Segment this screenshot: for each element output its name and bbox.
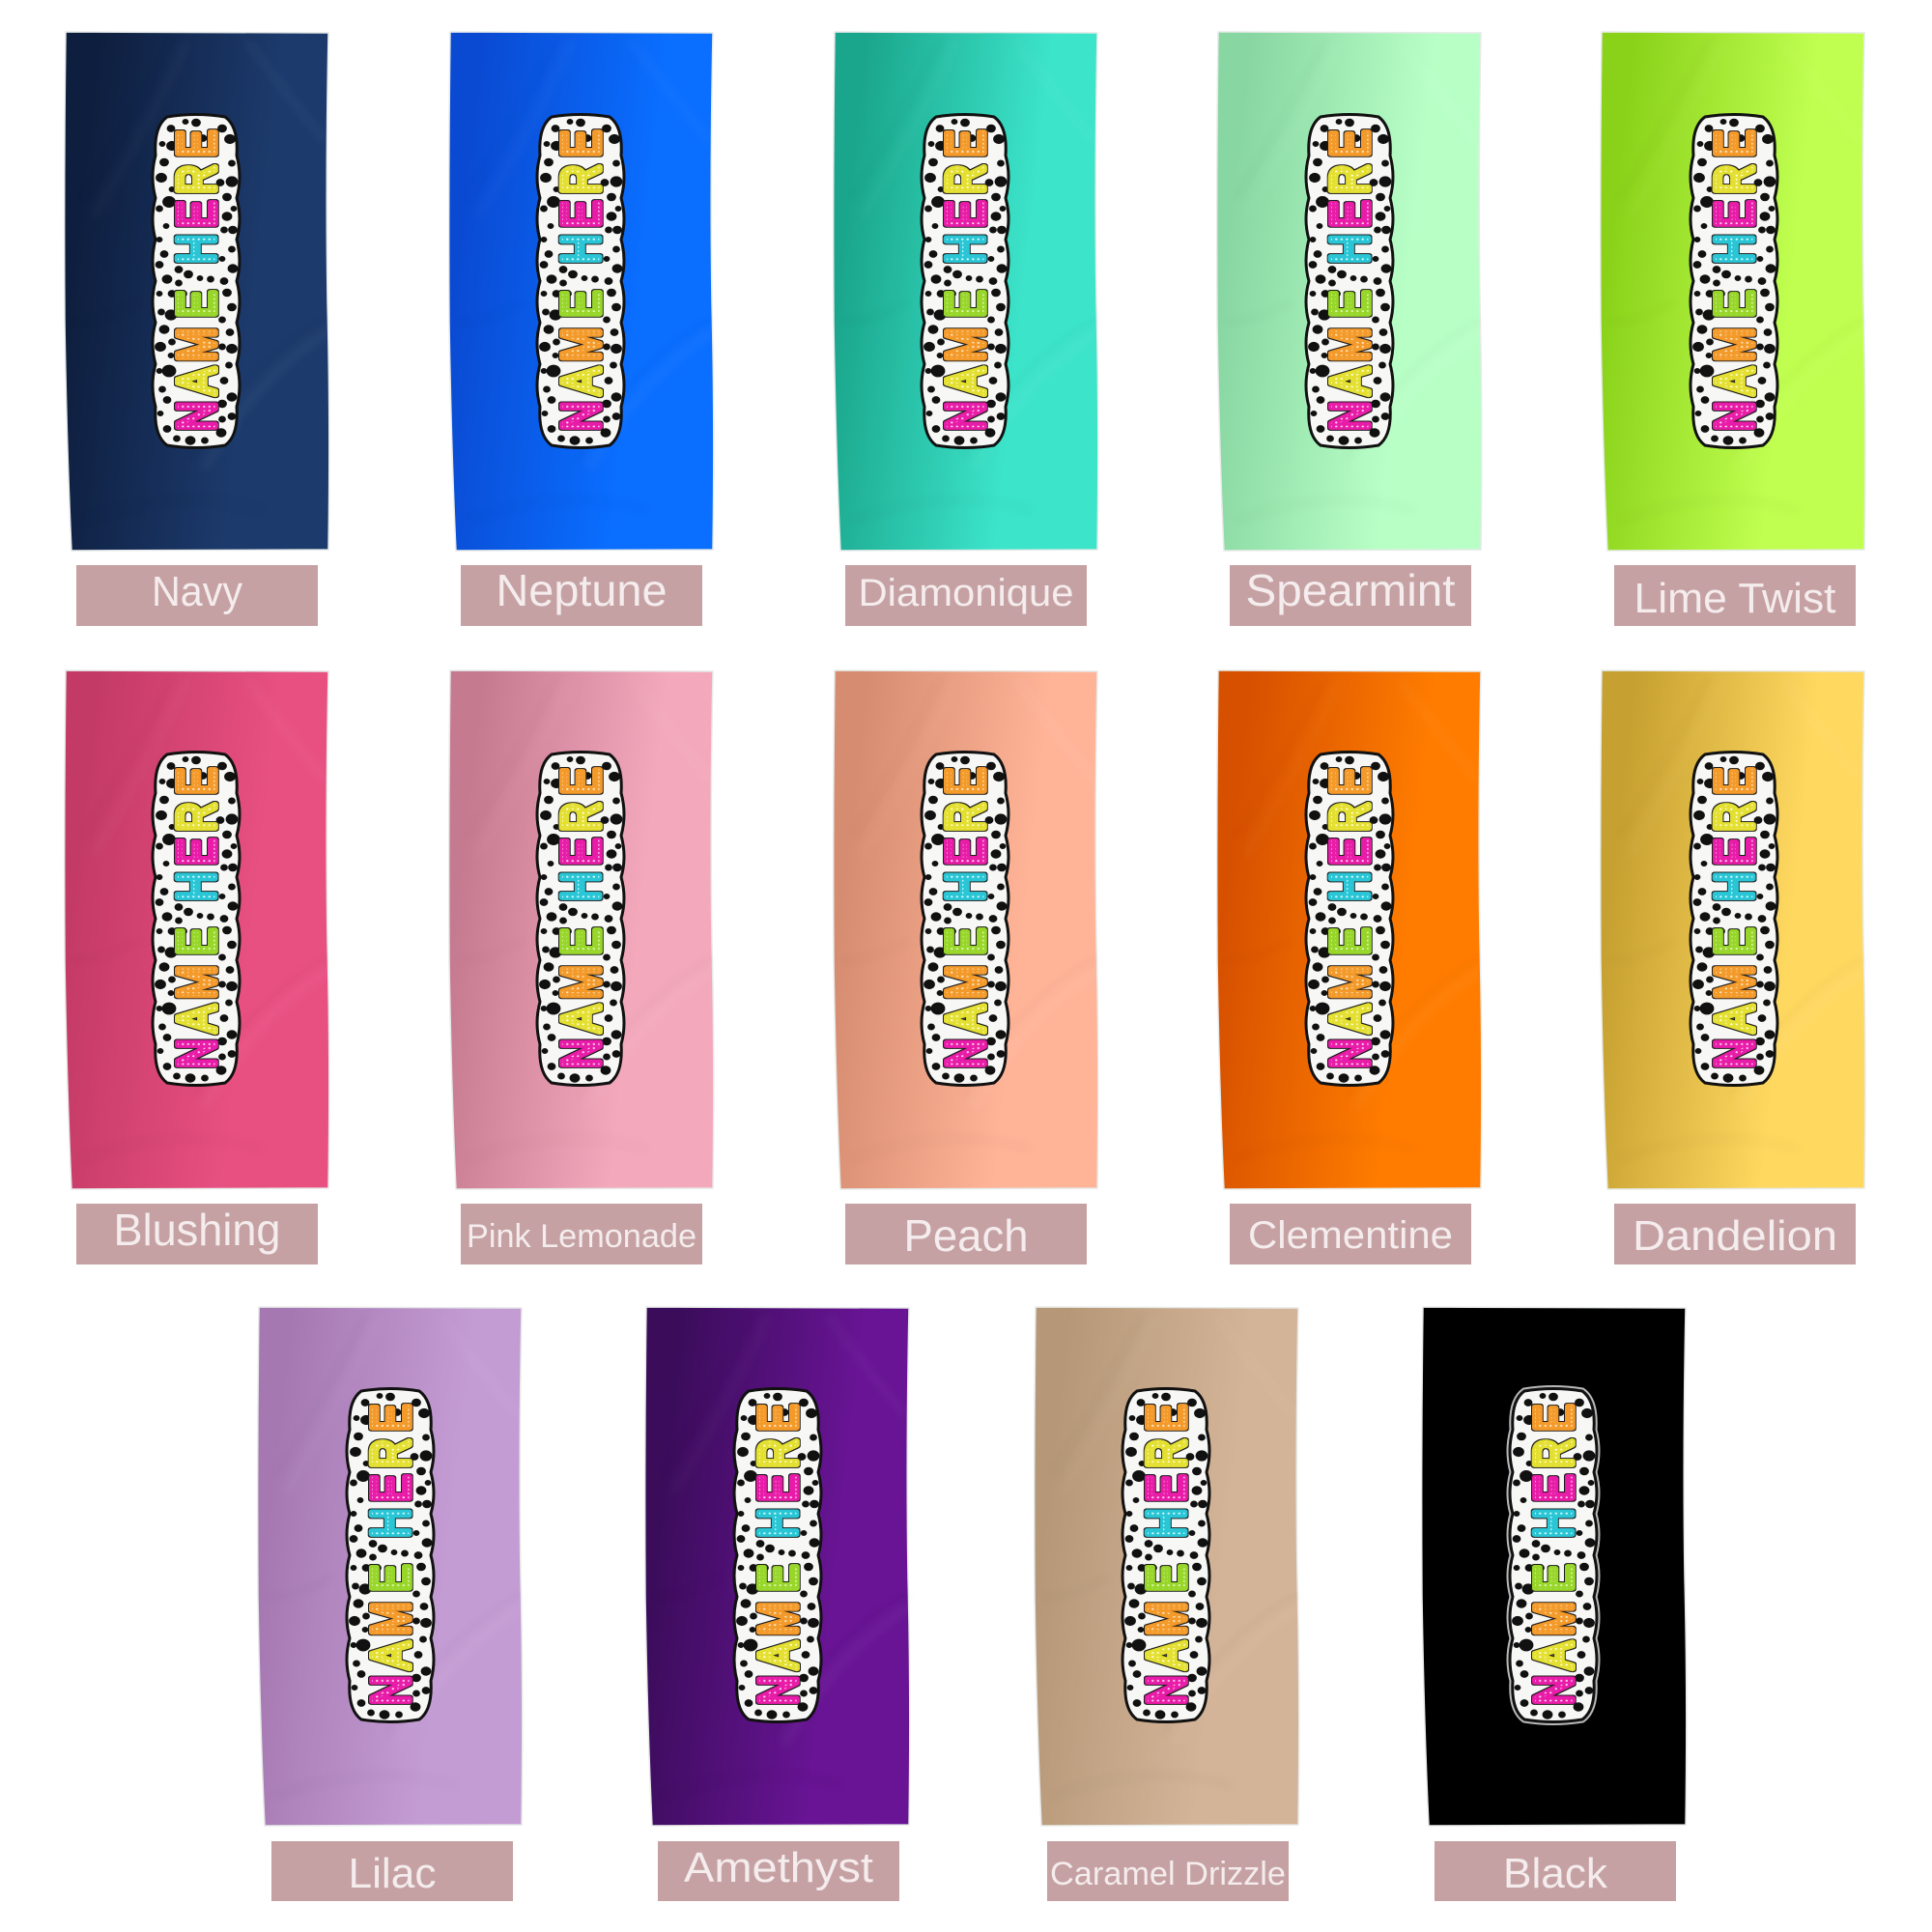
label: Black: Black — [1503, 1850, 1608, 1897]
name patch: NAME HERE — [1137, 1405, 1197, 1705]
label: Pink Lemonade: Pink Lemonade — [467, 1218, 696, 1255]
label: Diamonique: Diamonique — [858, 572, 1074, 614]
name patch — [1690, 114, 1777, 448]
panel: Pink Lemonade towel — [449, 670, 714, 1264]
towel: Clementine — [1217, 670, 1482, 1189]
name patch: NAME HERE — [1705, 130, 1765, 431]
panel: Blushing towel — [65, 670, 329, 1264]
panel: Navy towel — [65, 32, 329, 626]
label: Blushing: Blushing — [114, 1205, 280, 1255]
towel: Dandelion — [1601, 670, 1865, 1189]
name patch: NAME HERE — [936, 768, 996, 1068]
label: Caramel Drizzle: Caramel Drizzle — [1050, 1856, 1286, 1892]
name patch: NAME HERE — [1321, 768, 1380, 1068]
name patch — [153, 114, 240, 448]
panel: Amethyst towel — [645, 1307, 910, 1901]
name patch: NAME HERE — [1524, 1405, 1584, 1705]
name patch — [347, 1389, 434, 1721]
label: Neptune: Neptune — [497, 565, 667, 615]
label: Amethyst — [658, 1841, 899, 1901]
label: Dandelion — [1614, 1204, 1856, 1264]
label: Lime Twist — [1614, 565, 1856, 626]
name patch — [537, 114, 624, 448]
towel: Amethyst — [645, 1307, 910, 1826]
towel: Peach — [834, 670, 1098, 1189]
label: Spearmint: Spearmint — [1246, 565, 1456, 615]
towel: Black — [1422, 1307, 1687, 1826]
towel: Diamonique — [834, 32, 1098, 551]
name patch: NAME HERE — [1705, 768, 1765, 1068]
label: Navy — [76, 565, 318, 626]
panel: Lilac towel — [258, 1307, 523, 1901]
towel: Blushing — [65, 670, 329, 1189]
name patch: NAME HERE — [749, 1405, 809, 1705]
label: Peach: Peach — [904, 1210, 1028, 1261]
name patch: NAME HERE — [361, 1405, 421, 1705]
towel: Lilac — [258, 1307, 523, 1826]
panel: Peach towel — [834, 670, 1098, 1264]
name patch — [922, 752, 1009, 1086]
label: Amethyst: Amethyst — [684, 1844, 873, 1891]
label: Dandelion: Dandelion — [1633, 1212, 1837, 1260]
panel: Caramel Drizzle towel — [1035, 1307, 1299, 1901]
name patch — [153, 752, 240, 1086]
name patch — [734, 1389, 821, 1721]
name patch: NAME HERE — [167, 130, 227, 431]
label: Diamonique — [845, 565, 1087, 626]
towel: Spearmint — [1217, 32, 1482, 551]
label: Spearmint — [1230, 565, 1471, 626]
label: Peach — [845, 1204, 1087, 1264]
name patch: NAME HERE — [552, 768, 611, 1068]
name patch — [1122, 1389, 1209, 1721]
name patch: NAME HERE — [552, 130, 611, 431]
panel: Black towel — [1422, 1307, 1687, 1901]
towel: Caramel Drizzle — [1035, 1307, 1299, 1826]
panel: Clementine towel — [1217, 670, 1482, 1264]
panel: Diamonique towel — [834, 32, 1098, 626]
panel: Spearmint towel — [1217, 32, 1482, 626]
label: Lilac — [271, 1841, 513, 1901]
name patch — [537, 752, 624, 1086]
towel: Pink Lemonade — [449, 670, 714, 1189]
name patch — [1306, 752, 1393, 1086]
label: Navy: Navy — [152, 568, 242, 615]
label: Caramel Drizzle — [1047, 1841, 1289, 1901]
name patch: NAME HERE — [1321, 130, 1380, 431]
towel: Lime Twist — [1601, 32, 1865, 551]
panel: Neptune towel — [449, 32, 714, 626]
name patch — [1690, 752, 1777, 1086]
label: Neptune — [461, 565, 702, 626]
label: Pink Lemonade — [461, 1204, 702, 1264]
towel: Neptune — [449, 32, 714, 551]
label: Black — [1435, 1841, 1676, 1901]
name patch: NAME HERE — [936, 130, 996, 431]
label: Clementine: Clementine — [1248, 1214, 1453, 1257]
towel: Navy — [65, 32, 329, 551]
label: Lime Twist: Lime Twist — [1634, 575, 1835, 622]
name patch — [1306, 114, 1393, 448]
name patch: NAME HERE — [167, 768, 227, 1068]
panel: Dandelion towel — [1601, 670, 1865, 1264]
name patch — [922, 114, 1009, 448]
panel: Lime Twist towel — [1601, 32, 1865, 626]
name patch — [1510, 1389, 1597, 1721]
label: Lilac: Lilac — [348, 1850, 437, 1897]
label: Blushing — [76, 1204, 318, 1264]
label: Clementine — [1230, 1204, 1471, 1264]
